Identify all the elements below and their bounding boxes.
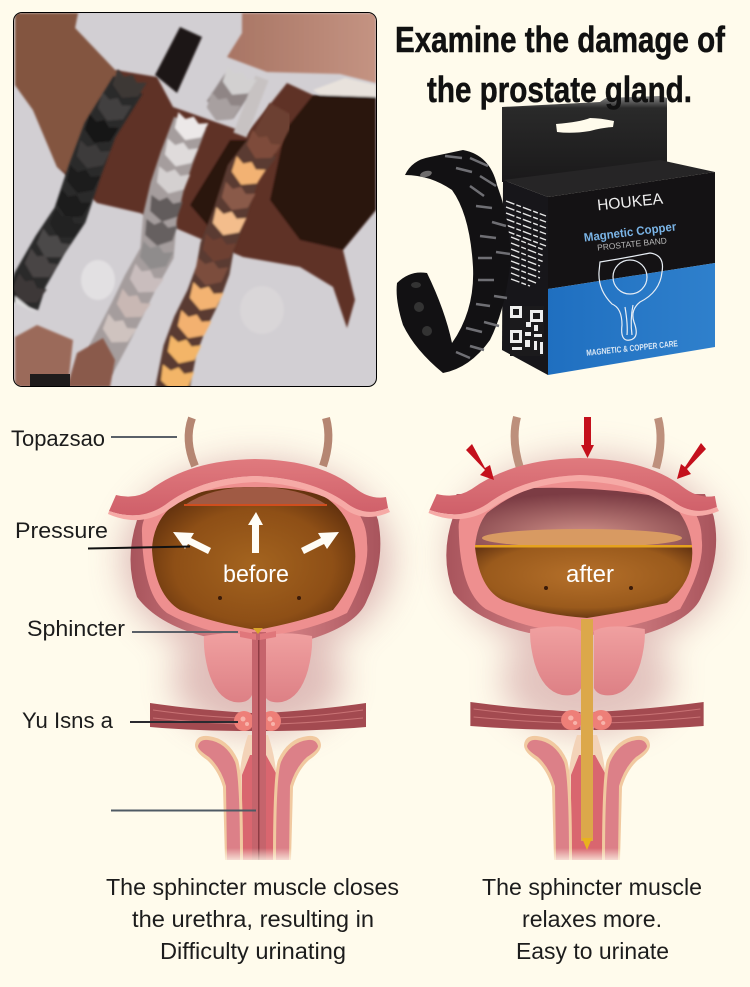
QR code (510, 306, 544, 356)
title (395, 19, 726, 110)
open urethra with urine flow (581, 619, 593, 850)
label: Yu Isns a: Yu Isns a (22, 708, 114, 733)
bottom fade (190, 848, 326, 864)
muscle band (470, 702, 704, 730)
hanger hole (556, 118, 614, 133)
box side (502, 180, 548, 375)
box front blue (548, 263, 715, 375)
urine in bladder (152, 487, 355, 630)
text block: after caption: Easy to urinate (516, 938, 669, 964)
lower anatomy (195, 735, 321, 860)
text block: after caption: relaxes more. (522, 906, 662, 932)
silver bracelet (97, 65, 262, 367)
pressure arrows (173, 512, 339, 554)
leader line: urethra (111, 810, 256, 812)
bladder wall (446, 474, 716, 636)
bottom fade (520, 848, 656, 864)
text block: after caption: The sphincter muscle (482, 874, 702, 900)
prostate (204, 633, 312, 702)
lower anatomy (524, 735, 650, 860)
ureters (189, 418, 328, 466)
muscle band (150, 703, 366, 731)
icon: black magnetic cuff bracelet (397, 150, 510, 373)
panel: before diagram (108, 418, 392, 864)
panel: bracelet photo (7, 12, 377, 395)
box footer: MAGNETIC & COPPER CARE (586, 338, 679, 358)
prostate (530, 626, 645, 695)
closed urethra (240, 628, 276, 860)
compression arrows (466, 417, 706, 480)
text block: after caption (482, 874, 702, 964)
box front black (548, 172, 715, 289)
peritoneum band (428, 458, 719, 519)
text block: before caption: the urethra, resulting in (132, 906, 374, 932)
black bracelet (7, 27, 202, 313)
text block: before caption: The sphincter muscle closes (106, 874, 399, 900)
text block: before caption: Difficulty urinating (160, 938, 346, 964)
thumb over silver bracelet (67, 338, 115, 387)
label: Sphincter: Sphincter (27, 616, 125, 641)
ureters (515, 417, 661, 468)
before label: before (223, 561, 289, 588)
text block: before caption (106, 874, 399, 964)
title: the prostate gland. (427, 69, 692, 110)
panel: after diagram (428, 417, 725, 864)
label: Topazsao: Topazsao (11, 426, 105, 451)
hanger tab (502, 96, 667, 182)
box logo: HOUKEA (596, 191, 664, 214)
copper bracelet (157, 110, 283, 395)
after label: after (566, 561, 614, 588)
box top (503, 160, 715, 197)
box subtitle: PROSTATE BAND (597, 235, 667, 253)
urine and air in bladder (475, 488, 692, 618)
soft tissue halo (449, 455, 725, 735)
bladder wall (130, 478, 380, 640)
box prostate outline icon (599, 253, 662, 340)
icon: product box (502, 96, 715, 375)
soft tissue halo (122, 460, 392, 735)
box product name: Magnetic Copper (583, 219, 677, 245)
peritoneum band (108, 459, 390, 520)
label: Pressure: Pressure (15, 518, 108, 543)
